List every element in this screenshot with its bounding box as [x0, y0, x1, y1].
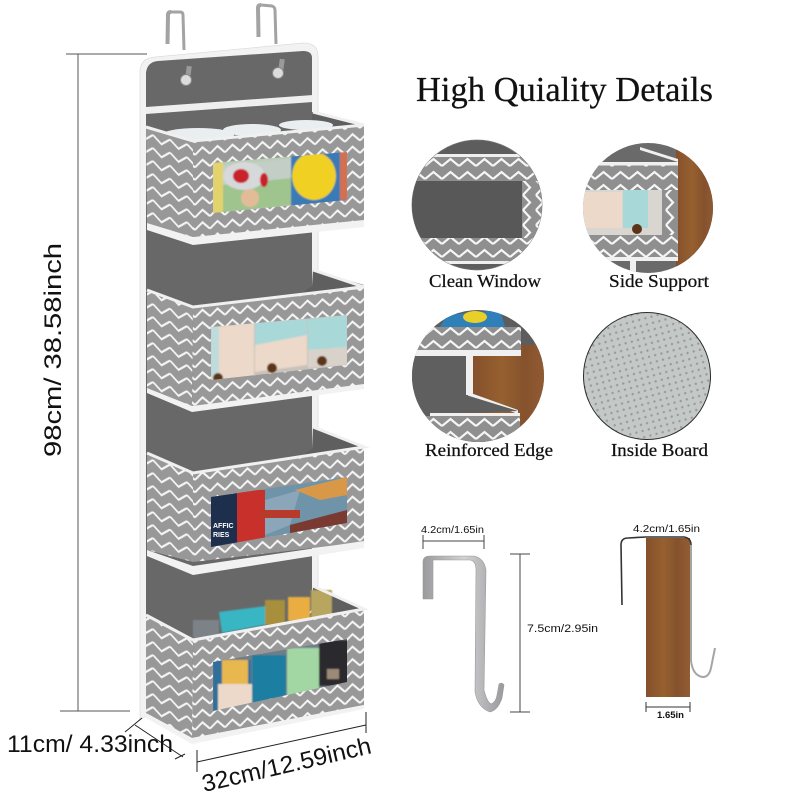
pocket 3 [147, 427, 364, 575]
door hook width label: 4.2cm/1.65in [633, 524, 700, 535]
pocket 4 side face [146, 615, 193, 738]
pocket 2 side face [147, 290, 193, 407]
pocket 1 bottom lip [147, 220, 364, 245]
pocket 2 edges [147, 270, 364, 307]
door thickness dimension [646, 702, 690, 712]
pocket 1 [146, 112, 364, 245]
hook width label: 4.2cm/1.65in [421, 525, 484, 536]
pocket 3 interior [300, 427, 364, 457]
title: High Quiality Details [416, 70, 713, 109]
pocket 1 window [213, 152, 347, 213]
depth label: 11cm/ 4.33inch [7, 731, 173, 758]
right wall screw [272, 59, 285, 78]
pocket 4 edges [146, 586, 364, 640]
stored white rolls [162, 120, 333, 142]
left wall screw [180, 66, 192, 86]
hook width dimension [423, 535, 484, 549]
pocket 4 window [213, 639, 347, 711]
pocket 3 front face [193, 447, 364, 562]
detail circle: inside board [584, 312, 710, 440]
hook height dimension [510, 554, 530, 712]
pocket 2 interior [300, 270, 364, 294]
detail circle: reinforced edge [410, 310, 547, 445]
stored toiletries [193, 590, 332, 638]
icon: right over-door hook [258, 5, 276, 44]
pocket 3 side face [147, 453, 193, 562]
pocket 1 side face [146, 127, 193, 237]
icon: left over-door hook [168, 12, 184, 50]
pocket 3 window: RIES [213, 532, 230, 539]
pocket 3 edges [147, 427, 364, 473]
height dimension line [60, 54, 147, 711]
pocket 3 window [210, 475, 350, 550]
pocket 4 [146, 586, 364, 744]
label: reinforced edge: Reinforced Edge [425, 440, 553, 460]
pocket 4 interior [300, 586, 364, 620]
door thickness label: 1.65in [657, 710, 684, 720]
width label: 32cm/12.59inch [199, 733, 374, 798]
pocket 4 bottom lip [146, 705, 364, 744]
icon: wood door section [646, 538, 690, 697]
pocket 4 front face [192, 609, 364, 738]
pocket 3 bottom lip [147, 541, 364, 575]
white board frame [140, 43, 318, 720]
pocket 3 window: AFFIC [213, 523, 234, 530]
label: clean window: Clean Window [429, 271, 541, 291]
hanger strip [146, 95, 313, 114]
hook height label: 7.5cm/2.95in [527, 623, 598, 635]
pocket 2 bottom lip [147, 384, 364, 412]
pocket 2 window [211, 315, 347, 380]
pocket 1 edges [146, 112, 364, 141]
pocket 1 interior [300, 112, 364, 132]
detail circle: clean window [410, 140, 547, 270]
pocket 2 front face [192, 287, 364, 407]
organizer product [140, 43, 364, 744]
pocket 1 front face [193, 125, 364, 237]
grey back panel [146, 51, 312, 714]
height label: 98cm/ 38.58inch [40, 243, 67, 457]
label: inside board: Inside Board [611, 440, 708, 460]
detail circle: side support [583, 140, 716, 276]
icon: hook side view [423, 556, 504, 712]
label: side support: Side Support [609, 271, 709, 291]
width dimension line [197, 712, 366, 772]
icon: hook on door wire [621, 537, 715, 677]
depth dimension line [125, 718, 185, 759]
pocket 2 [147, 270, 364, 412]
